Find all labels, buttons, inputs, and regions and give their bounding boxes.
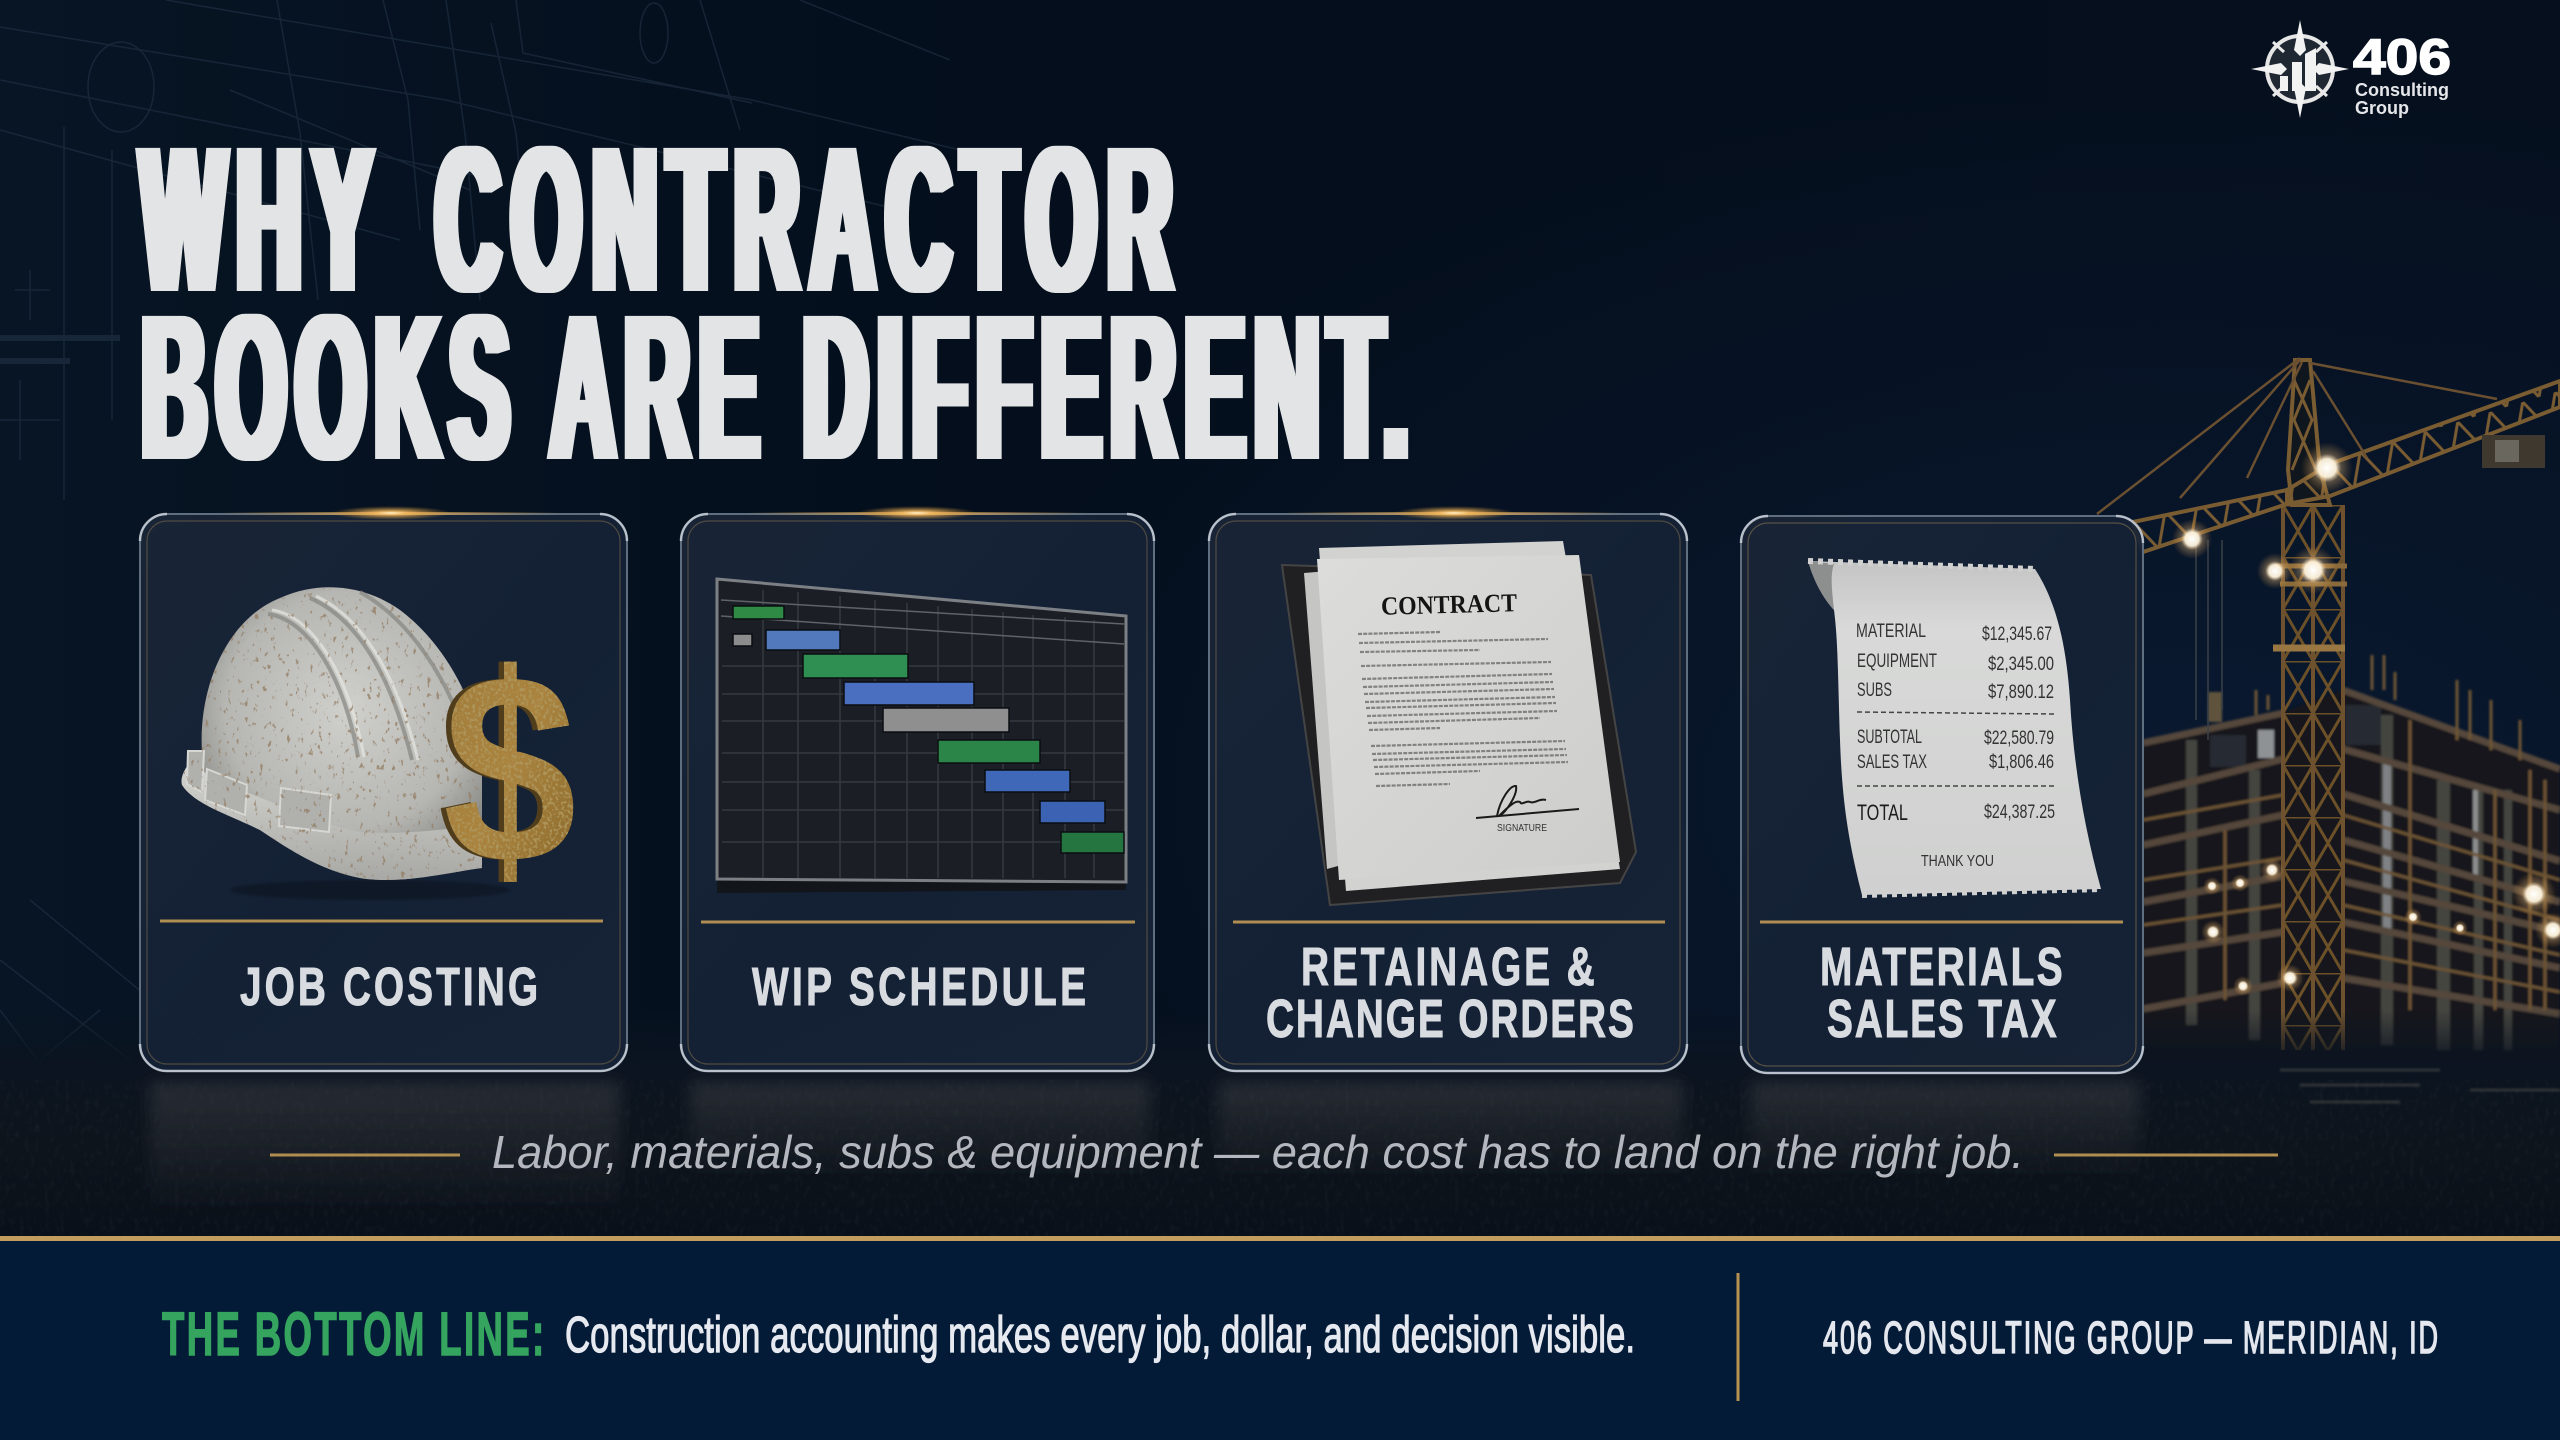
receipt line items: EQUIPMENT	[1857, 651, 1937, 672]
icon: receipt	[1808, 561, 2101, 895]
receipt line items: SALES TAX	[1857, 752, 1927, 773]
logo subtitle: Group	[2355, 98, 2409, 118]
logo subtitle: Consulting	[2355, 80, 2449, 100]
panel: WIP schedule	[681, 506, 1154, 1071]
icon: contract on folder	[1282, 541, 1636, 905]
label: materials sales tax: MATERIALS	[1820, 936, 2063, 996]
receipt line items	[1856, 621, 2055, 870]
receipt line items: $12,345.67	[1982, 624, 2052, 645]
title: BOOKS ARE DIFFERENT.	[142, 271, 1408, 503]
logo: 406 Consulting Group	[2251, 20, 2451, 118]
receipt line items: MATERIAL	[1856, 621, 1926, 642]
title: WHY CONTRACTOR	[141, 103, 1172, 335]
gantt bars	[733, 606, 1124, 853]
label: materials sales tax	[1820, 936, 2063, 1048]
title	[141, 103, 1408, 503]
crane mast and tower	[2273, 360, 2347, 1050]
receipt line items: SUBTOTAL	[1857, 727, 1922, 748]
work lights	[2172, 442, 2560, 996]
contract heading: CONTRACT	[1381, 588, 1517, 621]
building	[2143, 655, 2560, 1062]
receipt line items: TOTAL	[1857, 800, 1908, 825]
crane and building under construction	[2097, 358, 2560, 1062]
receipt line items: THANK YOU	[1921, 853, 1994, 870]
footer band	[0, 1236, 2560, 1440]
icon: hard hat with gold dollar sign	[181, 587, 577, 920]
panel: materials sales tax	[1741, 516, 2143, 1073]
label: job costing: JOB COSTING	[240, 956, 538, 1016]
blueprint line art background	[0, 0, 960, 1240]
icon: compass with rising bars	[2251, 20, 2349, 118]
panel: job costing	[140, 506, 627, 1071]
bottom line label: THE BOTTOM LINE:	[162, 1299, 544, 1368]
label: materials sales tax: SALES TAX	[1827, 988, 2057, 1048]
label: WIP schedule: WIP SCHEDULE	[752, 956, 1086, 1016]
signature	[1476, 786, 1579, 818]
label: retainage and change orders: RETAINAGE &	[1301, 936, 1595, 996]
firm name and location: 406 CONSULTING GROUP — MERIDIAN, ID	[1823, 1312, 2438, 1363]
dollar sign: $	[443, 619, 577, 920]
receipt line items: $22,580.79	[1984, 728, 2054, 749]
icon: contract on folder: SIGNATURE	[1497, 823, 1547, 834]
receipt line items: $7,890.12	[1988, 682, 2054, 703]
receipt line items: $2,345.00	[1988, 654, 2054, 675]
logo wordmark: 406	[2353, 29, 2451, 85]
chart: gantt schedule	[717, 579, 1126, 893]
label: retainage and change orders: CHANGE ORDERS	[1266, 988, 1634, 1048]
crane jib	[2097, 358, 2560, 740]
receipt line items: $1,806.46	[1989, 752, 2054, 773]
bottom line statement: Construction accounting makes every job, dollar, and decision visible.	[565, 1306, 1635, 1363]
receipt line items: SUBS	[1857, 680, 1892, 701]
tagline with gold rules: Labor, materials, subs & equipment — each cost has to land on the right job.	[492, 1126, 2024, 1178]
contract body text lines	[1358, 632, 1568, 786]
receipt line items: $24,387.25	[1984, 802, 2055, 823]
dark reflective floor	[0, 1010, 2560, 1236]
label: retainage and change orders	[1266, 936, 1634, 1048]
panel: retainage and change orders	[1209, 506, 1687, 1071]
